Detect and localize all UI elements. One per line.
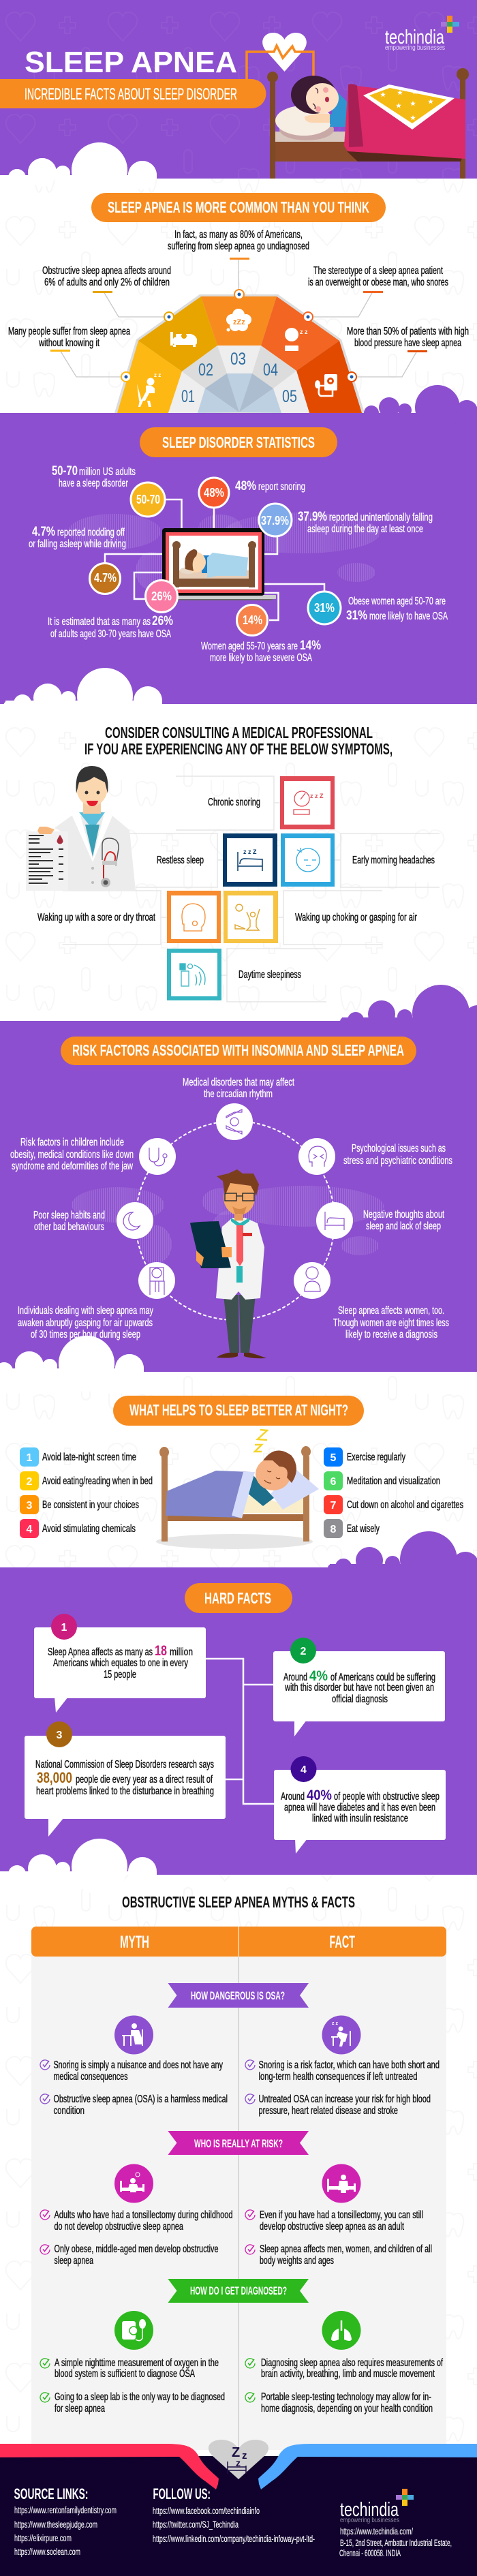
connector lines xyxy=(206,1659,274,1804)
risk: negative thoughts xyxy=(363,1209,444,1232)
fact list 1: long-term health consequences if left untreated xyxy=(259,2071,417,2083)
fact 3: National Commission of Sleep Disorders research says xyxy=(35,1759,214,1770)
fact: 80 percent undiagnosed xyxy=(168,229,309,260)
icon: person dozing on chair xyxy=(137,372,161,407)
fact 3: 3 xyxy=(57,1730,63,1741)
symptom: choking xyxy=(224,891,417,943)
stat: 26 percent xyxy=(48,614,173,640)
symptom: restless sleep: Restless sleep xyxy=(157,855,204,866)
myth list 3: for sleep apnea xyxy=(55,2403,105,2414)
chart: semicircular five-segment diagram xyxy=(114,294,365,413)
stat: 37.9 percent: 37.9% xyxy=(298,510,327,524)
icon: person on bed myth xyxy=(114,2164,153,2203)
ribbon: how dangerous xyxy=(168,1983,309,2008)
tip 3: Be consistent in your choices xyxy=(42,1499,139,1511)
panel: myths and facts xyxy=(0,1839,477,2461)
fact: high blood pressure xyxy=(347,326,469,352)
source links: SOURCE LINKS: xyxy=(14,2485,89,2502)
tip 1: 1 xyxy=(27,1452,33,1464)
illustration: man sleeping in bed xyxy=(156,1430,319,1549)
source links: https://www.rentonfamilydentistry.com xyxy=(14,2505,117,2515)
footer logo and address: https://www.techindia.com/ xyxy=(340,2526,413,2536)
stat: 50-70 million: have a sleep disorder xyxy=(59,478,128,489)
panel: header xyxy=(0,0,477,198)
stat: 26 percent: of adults aged 30-70 years have OSA xyxy=(50,628,171,640)
fact 4: 40% xyxy=(307,1788,332,1803)
stat: 14 percent xyxy=(201,639,321,664)
logo: techindia: techindia xyxy=(385,27,445,48)
icon: person at desk fact: z z xyxy=(332,2021,338,2026)
symptom: early morning headaches xyxy=(281,833,435,887)
footer logo and address: empowering businesses xyxy=(340,2517,399,2524)
myth list 3: Going to a sleep lab is the only way to be diagnosed xyxy=(55,2391,225,2403)
risk: children: Risk factors in children include xyxy=(20,1137,124,1148)
symptom: sore throat xyxy=(37,891,221,943)
icon: lungs xyxy=(322,2311,361,2350)
fact list 2: develop obstructive sleep apnea as an adult xyxy=(260,2221,404,2233)
icon: sleep cloud xyxy=(226,309,251,331)
ribbon: who is at risk: WHO IS REALLY AT RISK? xyxy=(194,2137,283,2150)
tip 6: 6 xyxy=(330,1476,337,1488)
fact: adults and children xyxy=(42,265,171,293)
fact: without knowing xyxy=(8,326,130,352)
symptom: daytime sleepiness: Daytime sleepiness xyxy=(238,969,301,981)
risk: gasping: of 30 times per hour during sleep xyxy=(31,1329,140,1340)
tip 6 xyxy=(324,1471,440,1490)
panel: footer xyxy=(0,2440,477,2576)
follow us xyxy=(153,2485,315,2544)
dashed ring xyxy=(136,1121,335,1320)
icon: heart with sleeper: z xyxy=(242,2450,247,2462)
myth list 1 xyxy=(40,2059,228,2117)
symptom: restless sleep: z z Z xyxy=(243,848,257,855)
stat: 37.9 percent: asleep during the day at least once xyxy=(307,523,423,535)
stat circle labels: 37.9% xyxy=(261,514,289,527)
icon: heart with sleeper: Z xyxy=(232,2445,240,2460)
fact 1: 18 xyxy=(155,1643,167,1659)
risk: gasping: Individuals dealing with sleep apnea may xyxy=(18,1305,153,1317)
tip 5: Exercise regularly xyxy=(347,1452,405,1463)
stat circle labels: 4.7% xyxy=(94,571,117,585)
risk: gasping: awaken abruptly gasping for air upwards xyxy=(18,1317,153,1329)
tip 5 xyxy=(324,1447,405,1467)
fact: without knowing: without knowing it xyxy=(38,337,100,349)
segment numbers xyxy=(181,350,297,406)
ribbon: diagnosis: HOW DO I GET DIAGNOSED? xyxy=(190,2284,287,2297)
stat circle labels: 48% xyxy=(204,486,224,500)
icon: heart with sleeper: z xyxy=(236,2457,241,2468)
footer logo and address: techindia xyxy=(340,2499,399,2521)
risk: negative thoughts: sleep and lack of sleep xyxy=(366,1221,441,1232)
heading pill: HARD FACTS xyxy=(204,1589,271,1607)
tip 2: 2 xyxy=(27,1476,33,1488)
fact 4 xyxy=(274,1756,446,1854)
fact 4: linked with insulin resistance xyxy=(312,1813,408,1824)
stat: 48 percent: report snoring xyxy=(258,481,305,493)
subtitle banner: INCREDIBLE FACTS ABOUT SLEEP DISORDER xyxy=(25,85,237,104)
fact 1: 1 xyxy=(61,1622,67,1634)
stat: 4.7 percent: or falling asleep while driving xyxy=(29,538,126,550)
fact: 80 percent undiagnosed: In fact, as many as 80% of Americans, xyxy=(174,229,303,241)
risk: circadian xyxy=(183,1077,294,1100)
heading pill: WHAT HELPS TO SLEEP BETTER AT NIGHT? xyxy=(129,1401,348,1419)
fact: without knowing: Many people suffer from sleep apnea xyxy=(8,326,130,337)
heading: OBSTRUCTIVE SLEEP APNEA MYTHS & FACTS xyxy=(122,1893,355,1911)
symptom: chronic snoring: z z Z xyxy=(310,793,324,799)
segment numbers: 03 xyxy=(230,350,246,369)
icon: heart with sleeper xyxy=(209,2440,268,2479)
stat: 48 percent xyxy=(235,479,305,493)
connector lines xyxy=(60,258,417,377)
risk: psychological xyxy=(343,1143,452,1167)
fact: adults and children: Obstructive sleep apnea affects around xyxy=(42,265,171,277)
symptom: restless sleep xyxy=(157,833,277,887)
source links: https://elixirpure.com xyxy=(14,2533,72,2543)
stat: 14 percent: more likely to have severe OSA xyxy=(210,652,312,664)
risk icons xyxy=(123,1109,344,1295)
symptom: early morning headaches: Early morning headaches xyxy=(352,855,435,866)
icon: person on bed fact xyxy=(322,2164,361,2203)
table header xyxy=(31,1927,446,1957)
fact list 3 xyxy=(245,2357,443,2414)
tip 3 xyxy=(20,1495,139,1514)
risk: negative thoughts: Negative thoughts about xyxy=(363,1209,444,1221)
risk: children: obesity, medical conditions like down xyxy=(10,1149,134,1161)
fact: 80 percent undiagnosed: suffering from sleep apnea go undiagnosed xyxy=(168,241,309,252)
symptom: chronic snoring: Chronic snoring xyxy=(208,797,260,808)
tip 8: Eat wisely xyxy=(347,1523,380,1535)
myth list 3 xyxy=(40,2357,225,2414)
fact 1 xyxy=(34,1614,206,1713)
world map xyxy=(72,1186,384,1263)
table header: MYTH xyxy=(120,1933,149,1952)
table background xyxy=(31,1952,446,2450)
panel: symptoms xyxy=(0,668,477,1021)
fact: stereotype xyxy=(308,265,448,293)
panel: statistics xyxy=(0,385,477,704)
table header: FACT xyxy=(330,1933,355,1952)
fact 4: 4 xyxy=(301,1764,307,1776)
tip 5: 5 xyxy=(330,1452,337,1464)
stat: 50-70 million xyxy=(52,464,136,489)
red arm xyxy=(0,2444,219,2489)
symptom: daytime sleepiness xyxy=(167,949,301,1000)
tip 7: 7 xyxy=(330,1500,337,1512)
ribbon: who is at risk xyxy=(168,2131,309,2155)
stat circles xyxy=(90,478,341,635)
segment numbers: 05 xyxy=(282,387,297,406)
fact list 2: body weights and ages xyxy=(260,2255,334,2267)
risk: habits: other bad behaviours xyxy=(34,1221,104,1233)
follow us: https://www.facebook.com/techindiainfo xyxy=(153,2506,260,2516)
icon: blood pressure monitor xyxy=(315,374,337,396)
icon: blood pressure cuff xyxy=(114,2311,153,2350)
fact 2: of Americans could be suffering xyxy=(330,1672,435,1683)
illustration: doctor with tablet xyxy=(190,1169,266,1358)
risk: women xyxy=(333,1305,449,1340)
fact 2: 4% xyxy=(309,1668,328,1684)
connector nodes xyxy=(121,290,356,382)
title: SLEEP APNEA xyxy=(25,46,237,79)
myth list 3: blood system is sufficient to diagnose OSA xyxy=(55,2368,195,2380)
fact list 1: pressure, heart related disease and stroke xyxy=(259,2105,398,2117)
fact 2 xyxy=(273,1638,445,1736)
icon: person at desk myth xyxy=(114,2016,153,2054)
icon: person at desk fact xyxy=(322,2016,361,2054)
panel: sleep better xyxy=(0,1336,477,1589)
cloud xyxy=(0,1839,157,1895)
source links xyxy=(14,2485,117,2557)
stat: 4.7 percent xyxy=(29,525,126,550)
tip 2: Avoid eating/reading when in bed xyxy=(42,1475,153,1487)
myth list 2: do not develop obstructive sleep apnea xyxy=(55,2221,183,2233)
stat circle labels: 31% xyxy=(314,601,335,615)
symptom: sore throat: Waking up with a sore or dry throat xyxy=(37,912,156,923)
stat: 14 percent: Women aged 55-70 years are xyxy=(201,641,298,652)
myth list 1: medical consequences xyxy=(53,2071,128,2083)
source links: https://www.soclean.com xyxy=(14,2547,80,2557)
panel: common xyxy=(0,142,477,413)
follow us: https://twitter.com/SJ_Techindia xyxy=(153,2519,238,2530)
tip 6: Meditation and visualization xyxy=(347,1475,440,1487)
fact 4: Around xyxy=(281,1791,305,1803)
frames xyxy=(63,776,440,1002)
segment numbers: 01 xyxy=(181,387,195,406)
stat: 50-70 million: million US adults xyxy=(79,466,136,478)
stat: 48 percent: 48% xyxy=(235,479,256,493)
fact list 1 xyxy=(245,2059,440,2117)
fact 3: heart problems linked to the disturbance in breathing xyxy=(36,1785,214,1797)
tip 4: 4 xyxy=(27,1524,33,1535)
heading pill xyxy=(140,427,337,457)
risk: circadian: the circadian rhythm xyxy=(204,1088,273,1100)
stat: 14 percent: 14% xyxy=(300,639,321,653)
risk: habits: Poor sleep habits and xyxy=(33,1210,105,1221)
risk: children: syndrome and deformities of the jaw xyxy=(12,1161,134,1172)
segment numbers: 04 xyxy=(263,361,278,380)
fact 2: 2 xyxy=(301,1646,307,1657)
risk: habits xyxy=(33,1210,105,1233)
illustration: doctor with report xyxy=(26,766,136,891)
stat circle labels xyxy=(94,486,335,627)
cloud xyxy=(0,142,157,198)
tip 3: 3 xyxy=(27,1500,33,1512)
logo: techindia xyxy=(385,16,459,52)
fact: adults and children: 6% of adults and only 2% of children xyxy=(44,277,170,288)
heading pill xyxy=(185,1583,292,1613)
heading pill: SLEEP DISORDER STATISTICS xyxy=(162,433,315,451)
fact 4: of people with obstructive sleep xyxy=(334,1791,440,1803)
stat: 50-70 million: 50-70 xyxy=(52,464,78,478)
fact 1: Americans which equates to one in every xyxy=(53,1657,188,1669)
stat: 31 percent: 31% xyxy=(346,609,367,623)
risk: circadian: Medical disorders that may affect xyxy=(183,1077,294,1088)
purple cloud xyxy=(340,985,477,1042)
icon: sleep cloud: zZz xyxy=(233,318,245,326)
tip 1 xyxy=(20,1447,136,1467)
panel: risk factors xyxy=(0,985,477,1392)
tip 1: Avoid late-night screen time xyxy=(42,1452,136,1463)
myth list 2 xyxy=(40,2209,232,2267)
cloud xyxy=(3,668,162,724)
icon: heart monitor xyxy=(247,33,313,80)
follow us: https://www.linkedin.com/company/techindia-infoway-pvt-ltd- xyxy=(153,2534,315,2544)
ribbon: diagnosis xyxy=(168,2279,309,2303)
illustration: laptop with sleeper xyxy=(162,528,276,600)
illustration: child sleeping in bed xyxy=(267,68,469,179)
stat circle labels: 14% xyxy=(243,613,262,627)
risk: gasping xyxy=(18,1305,153,1340)
myth list 2: Adults who have had a tonsillectomy during childhood xyxy=(55,2209,233,2221)
heading pill xyxy=(113,1396,364,1426)
heading pill xyxy=(61,1037,416,1065)
panel: hard facts xyxy=(0,1567,477,1875)
purple cloud xyxy=(364,385,477,430)
connector lines xyxy=(105,500,324,620)
cloud xyxy=(0,1336,144,1392)
ribbon: how dangerous: HOW DANGEROUS IS OSA? xyxy=(191,1989,285,2002)
myth list 1: Snoring is simply a nuisance and does not have any xyxy=(53,2059,223,2071)
footer logo and address: Chennai - 600058. INDIA xyxy=(339,2548,401,2558)
world map xyxy=(68,512,380,590)
stat circle labels: 26% xyxy=(151,589,172,603)
fact 3: 38,000 xyxy=(37,1769,72,1786)
stat: 4.7 percent: reported nodding off xyxy=(57,527,125,538)
risk circles xyxy=(117,1103,353,1299)
myth list 2: Only obese, middle-aged men develop obstructive xyxy=(55,2243,218,2255)
stat: 37.9 percent: reported unintentionally falling xyxy=(329,512,433,523)
logo: techindia: empowering businesses xyxy=(385,44,445,52)
segment numbers: 02 xyxy=(198,361,213,380)
source links: https://www.thesleepjudge.com xyxy=(14,2519,97,2530)
stat: 4.7 percent: 4.7% xyxy=(32,525,55,539)
icon: snoring head: z z xyxy=(300,328,308,335)
fact 2: official diagnosis xyxy=(332,1693,388,1705)
blue arm xyxy=(258,2444,477,2489)
fact list 2 xyxy=(245,2209,432,2267)
tip 8: 8 xyxy=(330,1524,337,1535)
cloud xyxy=(328,1531,477,1589)
icon: person dozing on chair: z z xyxy=(154,372,161,378)
tip 2 xyxy=(20,1471,153,1490)
heading xyxy=(84,724,393,758)
myth list 1: condition xyxy=(53,2105,84,2117)
myth list 3: A simple nighttime measurement of oxygen in the xyxy=(55,2357,219,2369)
stat circle labels: 50-70 xyxy=(136,493,160,506)
tip 4: Avoid stimulating chemicals xyxy=(42,1523,136,1535)
tip 4 xyxy=(20,1519,136,1538)
icon: bed xyxy=(170,332,197,347)
stat: 26 percent: It is estimated that as many as xyxy=(48,616,151,628)
tip 8 xyxy=(324,1519,380,1538)
fact 1: 15 people xyxy=(104,1669,136,1681)
symptom: chronic snoring xyxy=(208,776,335,829)
icon: snoring head xyxy=(285,328,308,351)
footer logo and address xyxy=(339,2489,452,2558)
fact 2: Around xyxy=(283,1672,307,1683)
follow us: FOLLOW US: xyxy=(153,2485,211,2502)
heading pill xyxy=(91,193,386,222)
tip 7 xyxy=(324,1495,463,1514)
myth list 2: sleep apnea xyxy=(55,2255,93,2267)
risk: women: likely to receive a diagnosis xyxy=(345,1329,437,1340)
stat: 26 percent: 26% xyxy=(152,614,173,628)
fact 3: people die every year as a direct result of xyxy=(76,1774,213,1785)
fact 1: million xyxy=(170,1646,193,1658)
stat: 31 percent xyxy=(346,596,448,623)
risk: children xyxy=(10,1137,134,1172)
stat: 37.9 percent xyxy=(298,510,433,535)
fact 3 xyxy=(25,1721,226,1837)
fact 1: Sleep Apnea affects as many as xyxy=(48,1646,153,1658)
subtitle banner xyxy=(0,79,266,108)
symptom: choking: Waking up choking or gasping for air xyxy=(295,912,417,923)
myth list 1: Obstructive sleep apnea (OSA) is a harmless medical xyxy=(53,2094,228,2105)
